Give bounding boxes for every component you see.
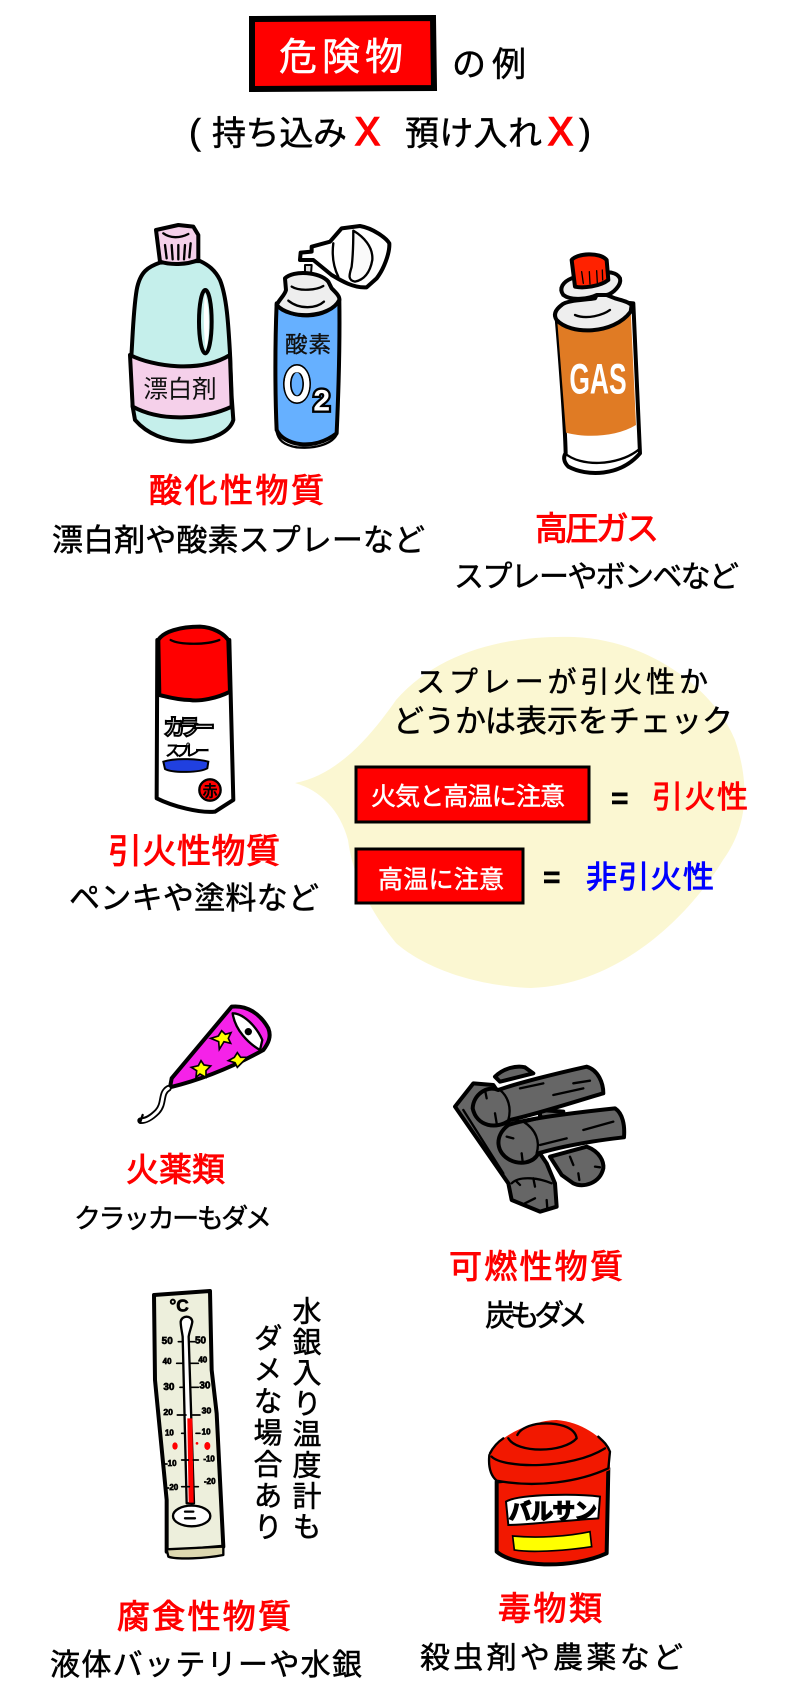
icon: thermometer: -20 bbox=[204, 1477, 216, 1486]
panel: flammable substances bbox=[69, 627, 319, 916]
callout: spray label check: どうかは表示をチェック bbox=[393, 704, 733, 739]
description: 漂白剤や酸素スプレーなど bbox=[52, 523, 425, 558]
callout text: スプレーが引火性か bbox=[416, 666, 708, 699]
icon: oxygen spray: O bbox=[283, 356, 311, 412]
description: スプレーやボンベなど bbox=[454, 561, 739, 594]
label: non-flammable: 非引火性 bbox=[586, 860, 714, 895]
heading: 可燃性物質: 可燃性物質 bbox=[449, 1248, 623, 1285]
icon: thermometer: 30 bbox=[199, 1380, 211, 1391]
icon: gas can bbox=[555, 254, 640, 473]
icon: oxygen spray: 2 bbox=[313, 385, 330, 418]
icon: color spray: 赤 bbox=[202, 784, 218, 801]
panel: corrosive substances bbox=[50, 1291, 362, 1682]
panel: poisons bbox=[420, 1420, 683, 1675]
description: 液体バッテリーや水銀 bbox=[50, 1649, 362, 1682]
icon: thermometer: 40 bbox=[163, 1357, 172, 1366]
icon: gas can: GAS bbox=[569, 355, 627, 403]
icon: thermometer: 10 bbox=[202, 1427, 211, 1436]
subtitle bbox=[189, 110, 591, 154]
heading: 火薬類: 火薬類 bbox=[126, 1151, 225, 1188]
label: non-flammable: 高温に注意 bbox=[378, 866, 504, 894]
heading: 酸化性物質: 酸化性物質 bbox=[149, 472, 324, 509]
title suffix: の例 bbox=[452, 46, 526, 84]
title box: 危険物: 危険物 bbox=[279, 37, 403, 79]
panel: explosives bbox=[74, 1006, 272, 1234]
speech bubble bbox=[295, 637, 744, 988]
label: flammable: 火気と高温に注意 bbox=[371, 783, 565, 811]
icon: color spray: スプレー bbox=[165, 743, 210, 760]
title bbox=[252, 18, 526, 89]
icon: thermometer: 20 bbox=[163, 1407, 173, 1417]
subtitle: 預け入れ bbox=[405, 115, 542, 153]
label: flammable: = bbox=[611, 782, 629, 815]
icon: thermometer bbox=[154, 1291, 223, 1558]
vertical note: ダメな場合あり bbox=[249, 1323, 282, 1544]
panel: combustible substances bbox=[449, 1067, 624, 1333]
subtitle: ( bbox=[189, 111, 201, 152]
icon: insecticide can: バルサン bbox=[509, 1498, 597, 1524]
icon: thermometer: 30 bbox=[163, 1382, 175, 1393]
vertical note: 水銀入り温度計も bbox=[288, 1296, 322, 1542]
label: flammable bbox=[356, 767, 748, 822]
icon: thermometer: °C bbox=[169, 1295, 189, 1315]
icon: thermometer: 30 bbox=[202, 1405, 211, 1415]
label: non-flammable: = bbox=[543, 861, 561, 894]
subtitle: ) bbox=[579, 111, 591, 152]
icon: thermometer: 10 bbox=[165, 1428, 174, 1437]
icon: insecticide can bbox=[489, 1420, 610, 1564]
heading: 高圧ガス: 高圧ガス bbox=[535, 510, 659, 547]
icon: thermometer: 50 bbox=[195, 1335, 207, 1346]
callout: spray label check bbox=[295, 637, 748, 988]
icon: color spray: カラー bbox=[163, 715, 215, 740]
description: クラッカーもダメ bbox=[74, 1204, 272, 1234]
icon: thermometer: 50 bbox=[162, 1336, 173, 1347]
icon: color spray bbox=[157, 627, 233, 812]
label: non-flammable bbox=[356, 849, 714, 903]
heading: 引火性物質: 引火性物質 bbox=[108, 833, 280, 871]
icon: thermometer: -10 bbox=[203, 1455, 215, 1464]
panel: oxidizing substances bbox=[52, 225, 425, 558]
heading: 腐食性物質: 腐食性物質 bbox=[117, 1598, 291, 1635]
subtitle: X bbox=[548, 110, 573, 154]
description: 炭もダメ bbox=[485, 1300, 588, 1333]
panel: high-pressure gas bbox=[454, 254, 739, 594]
icon: bleach bottle: 漂白剤 bbox=[143, 376, 217, 404]
heading: 毒物類: 毒物類 bbox=[498, 1590, 602, 1627]
description: ペンキや塗料など bbox=[69, 881, 319, 916]
icon: oxygen spray: 酸素 bbox=[285, 332, 331, 358]
icon: thermometer: 40 bbox=[198, 1356, 208, 1365]
subtitle: X bbox=[355, 110, 380, 154]
icon: oxygen spray bbox=[275, 226, 389, 448]
icon: bleach bottle bbox=[130, 225, 233, 442]
vertical note bbox=[249, 1296, 322, 1544]
icon: charcoal bbox=[455, 1067, 624, 1212]
icon: party cracker bbox=[140, 1006, 270, 1123]
icon: thermometer: -10 bbox=[165, 1459, 177, 1468]
subtitle: 持ち込み bbox=[212, 115, 347, 153]
description: 殺虫剤や農薬など bbox=[420, 1642, 683, 1675]
label: flammable: 引火性 bbox=[652, 780, 748, 815]
icon: thermometer: -20 bbox=[167, 1483, 179, 1492]
title box: 危険物 bbox=[252, 18, 434, 89]
